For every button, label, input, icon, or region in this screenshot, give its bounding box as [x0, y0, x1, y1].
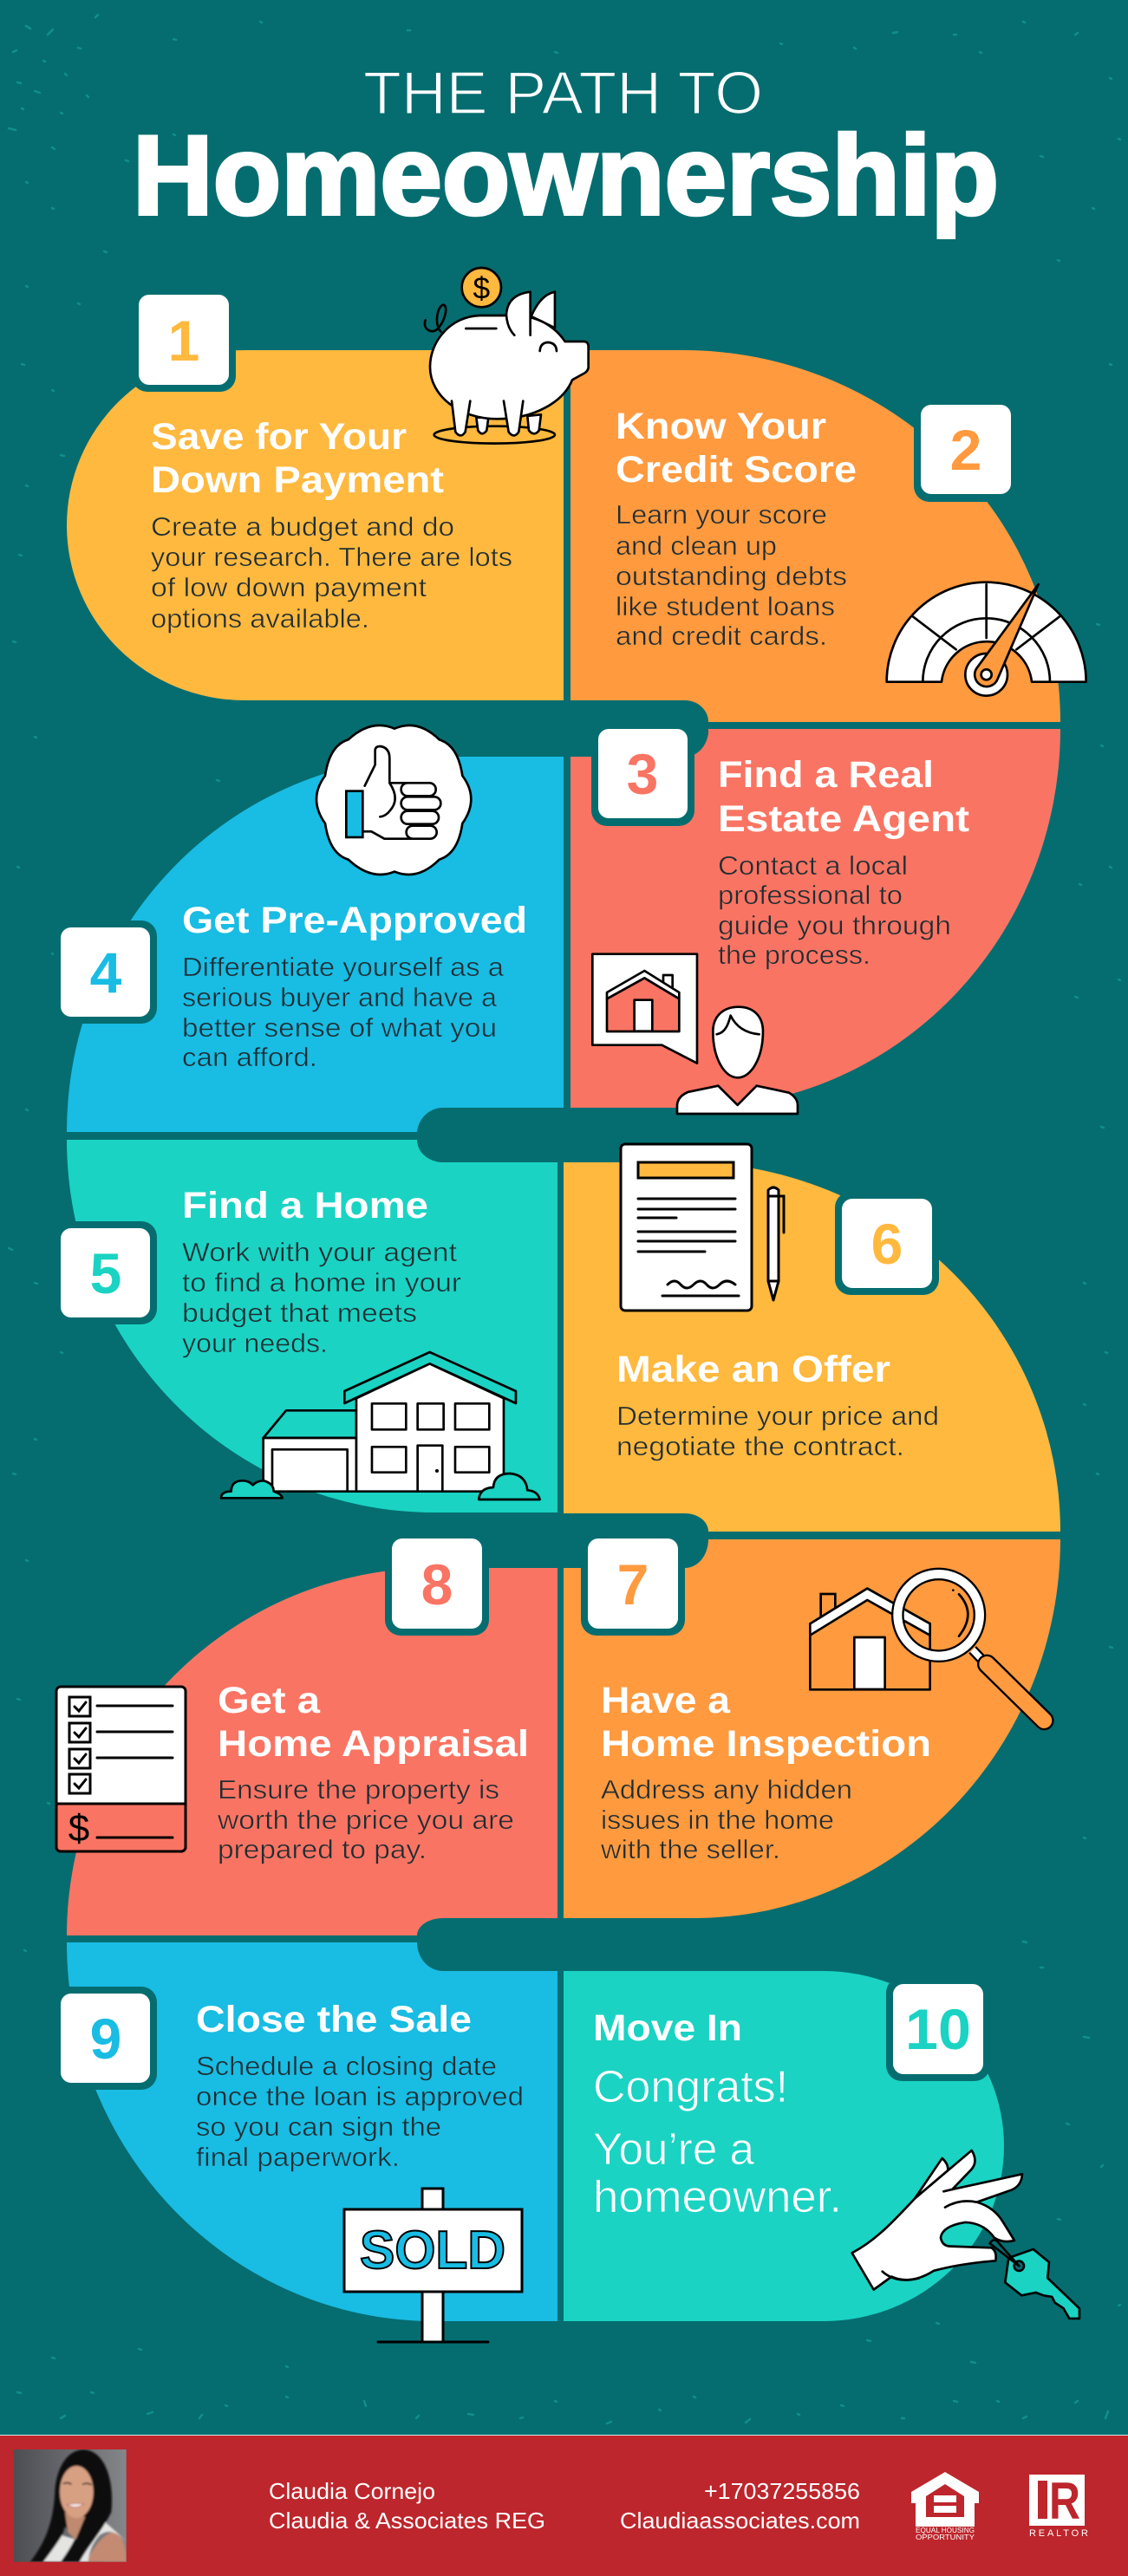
- heading: Down Payment: [151, 459, 444, 501]
- body text: serious buyer and have a: [182, 982, 498, 1012]
- contact details: Claudiaassociates.com: [620, 2508, 860, 2534]
- body text: options available.: [151, 603, 369, 634]
- body text: and credit cards.: [616, 621, 827, 651]
- body text: [182, 952, 505, 1072]
- panel: step 6 make an offer: [564, 1144, 1060, 1532]
- heading: Estate Agent: [718, 798, 969, 840]
- heading: [218, 1680, 529, 1765]
- badge 2: 2: [950, 418, 981, 482]
- body text: Determine your price and: [616, 1401, 939, 1431]
- body text: negotiate the contract.: [616, 1431, 904, 1461]
- badge 4: [54, 920, 157, 1024]
- shape: orange half: [564, 1539, 1060, 1918]
- body text: your research. There are lots: [151, 542, 512, 572]
- shape: coral half: [67, 1568, 557, 1935]
- congratulations text: homeowner.: [593, 2172, 842, 2222]
- icon: appraisal checklist: $: [68, 1807, 89, 1850]
- badge 3: 3: [627, 742, 658, 806]
- body text: Create a budget and do: [151, 511, 454, 542]
- contact details: [620, 2478, 860, 2534]
- title line 2: Homeownership: [133, 112, 999, 238]
- panel: step 5 find a home: [54, 1140, 557, 1512]
- heading: Get a: [218, 1680, 321, 1721]
- panel: step 7 home inspection: [564, 1532, 1060, 1918]
- heading: [616, 406, 857, 491]
- badge 9: [54, 1987, 157, 2090]
- heading: [718, 754, 969, 840]
- body text: [196, 2051, 524, 2172]
- body text: Differentiate yourself as a: [182, 952, 505, 982]
- badge 1: [132, 288, 236, 392]
- agent photo: [14, 2449, 127, 2562]
- heading: Find a Real: [718, 754, 934, 796]
- logo: realtor: [1029, 2472, 1088, 2539]
- body text: Learn your score: [616, 499, 827, 530]
- body text: [718, 850, 951, 970]
- heading: Move In: [593, 2007, 742, 2049]
- body text: guide you through: [718, 910, 951, 940]
- footer: [0, 2435, 1128, 2576]
- shape: yellow half: [564, 1162, 1060, 1532]
- body text: [616, 499, 847, 651]
- shape: blue half: [67, 1942, 557, 2321]
- heading: Find a Home: [182, 1185, 428, 1226]
- body text: better sense of what you: [182, 1012, 497, 1043]
- body text: final paperwork.: [196, 2142, 400, 2172]
- body text: and clean up: [616, 530, 777, 561]
- congratulations text: Congrats!: [593, 2062, 788, 2112]
- body text: [616, 1401, 939, 1461]
- badge 8: [385, 1532, 489, 1636]
- badge 2: [914, 398, 1018, 502]
- heading: Credit Score: [616, 449, 857, 491]
- body text: Schedule a closing date: [196, 2051, 497, 2081]
- panel: step 8 home appraisal: [56, 1532, 557, 1935]
- shape: green half: [564, 1971, 1004, 2321]
- title line 1: THE PATH TO: [363, 59, 763, 127]
- panel: step 2 credit score: [571, 350, 1086, 722]
- heading: Have a: [601, 1680, 731, 1721]
- body text: once the loan is approved: [196, 2081, 524, 2111]
- logo: equal housing opportunity: OPPORTUNITY: [916, 2534, 975, 2541]
- badge 1: 1: [168, 309, 199, 373]
- icon: house under magnifier: [810, 1574, 1044, 1721]
- body text: outstanding debts: [616, 561, 847, 591]
- icon: hand holding key: [852, 2150, 1079, 2319]
- icon: piggy bank: [425, 268, 589, 444]
- icon: credit gauge: [887, 582, 1086, 696]
- agent name: Claudia & Associates REG: [269, 2508, 545, 2534]
- body text: prepared to pay.: [218, 1834, 427, 1864]
- badge 10: 10: [905, 1997, 971, 2061]
- body text: of low down payment: [151, 572, 427, 602]
- heading: Home Inspection: [601, 1723, 931, 1765]
- heading: Make an Offer: [616, 1349, 890, 1390]
- body text: Address any hidden: [601, 1774, 852, 1805]
- heading: Get Pre-Approved: [182, 900, 527, 941]
- body text: professional to: [718, 880, 903, 910]
- congratulations text: You’re a: [593, 2124, 754, 2175]
- panel: step 3 real estate agent: [571, 722, 1060, 1114]
- icon: agent with house speech bubble: [592, 954, 798, 1114]
- badge 6: [835, 1192, 939, 1295]
- body text: Contact a local: [718, 850, 908, 881]
- icon: appraisal checklist: [56, 1687, 186, 1851]
- badge 5: 5: [90, 1241, 121, 1305]
- body text: budget that meets: [182, 1298, 417, 1328]
- body text: [217, 1774, 514, 1864]
- icon: thumbs up seal: [316, 725, 471, 875]
- body text: [151, 511, 512, 634]
- shape: orange half: [571, 350, 1060, 722]
- body text: Ensure the property is: [218, 1774, 499, 1805]
- heading: Save for Your: [151, 416, 407, 458]
- panel: step 9 close the sale: [54, 1942, 557, 2342]
- badge 6: 6: [871, 1212, 903, 1276]
- icon: sold sign: [344, 2189, 522, 2342]
- body text: with the seller.: [600, 1834, 780, 1864]
- shape: yellow half: [67, 350, 564, 700]
- heading: Close the Sale: [196, 1999, 472, 2040]
- heading: Know Your: [616, 406, 826, 447]
- title: [133, 59, 999, 238]
- logo: equal housing opportunity: [911, 2472, 979, 2541]
- agent name: Claudia Cornejo: [269, 2478, 435, 2504]
- body text: your needs.: [182, 1328, 328, 1358]
- badge 7: 7: [617, 1552, 649, 1617]
- icon: house: [221, 1352, 540, 1499]
- badge 8: 8: [421, 1552, 453, 1617]
- body text: like student loans: [616, 591, 835, 621]
- shape: blue half: [67, 757, 564, 1132]
- heading: [601, 1680, 931, 1765]
- body text: the process.: [718, 940, 870, 970]
- congratulations text: [593, 2062, 842, 2222]
- body text: can afford.: [182, 1042, 317, 1072]
- agent name: [269, 2478, 545, 2534]
- body text: [600, 1774, 852, 1864]
- logo: equal housing opportunity: EQUAL HOUSING: [916, 2527, 975, 2534]
- badge 7: [581, 1532, 685, 1636]
- badge 9: 9: [90, 2007, 121, 2071]
- body text: so you can sign the: [196, 2111, 441, 2142]
- shape: green half: [67, 1140, 557, 1512]
- heading: [151, 416, 444, 501]
- body text: to find a home in your: [182, 1267, 461, 1298]
- icon: sold sign: SOLD: [360, 2221, 505, 2280]
- panel: step 10 move in: [564, 1971, 1079, 2321]
- panel: step 4 pre-approved: [54, 725, 564, 1132]
- badge 3: [591, 722, 694, 826]
- icon: contract and pen: [621, 1144, 784, 1311]
- panel: step 1 down payment: [67, 268, 589, 700]
- heading: Home Appraisal: [218, 1723, 529, 1765]
- shape: coral half: [571, 729, 1060, 1108]
- icon: piggy bank: $: [473, 271, 490, 305]
- badge 4: 4: [90, 940, 122, 1005]
- logo: realtor: REALTOR: [1029, 2528, 1088, 2539]
- body text: [182, 1237, 461, 1358]
- contact details: +17037255856: [704, 2478, 860, 2504]
- body text: issues in the home: [601, 1805, 834, 1835]
- badge 10: [886, 1977, 990, 2081]
- logo: realtor: R: [1049, 2472, 1080, 2530]
- badge 5: [54, 1221, 157, 1324]
- body text: worth the price you are: [217, 1805, 514, 1835]
- body text: Work with your agent: [182, 1237, 457, 1267]
